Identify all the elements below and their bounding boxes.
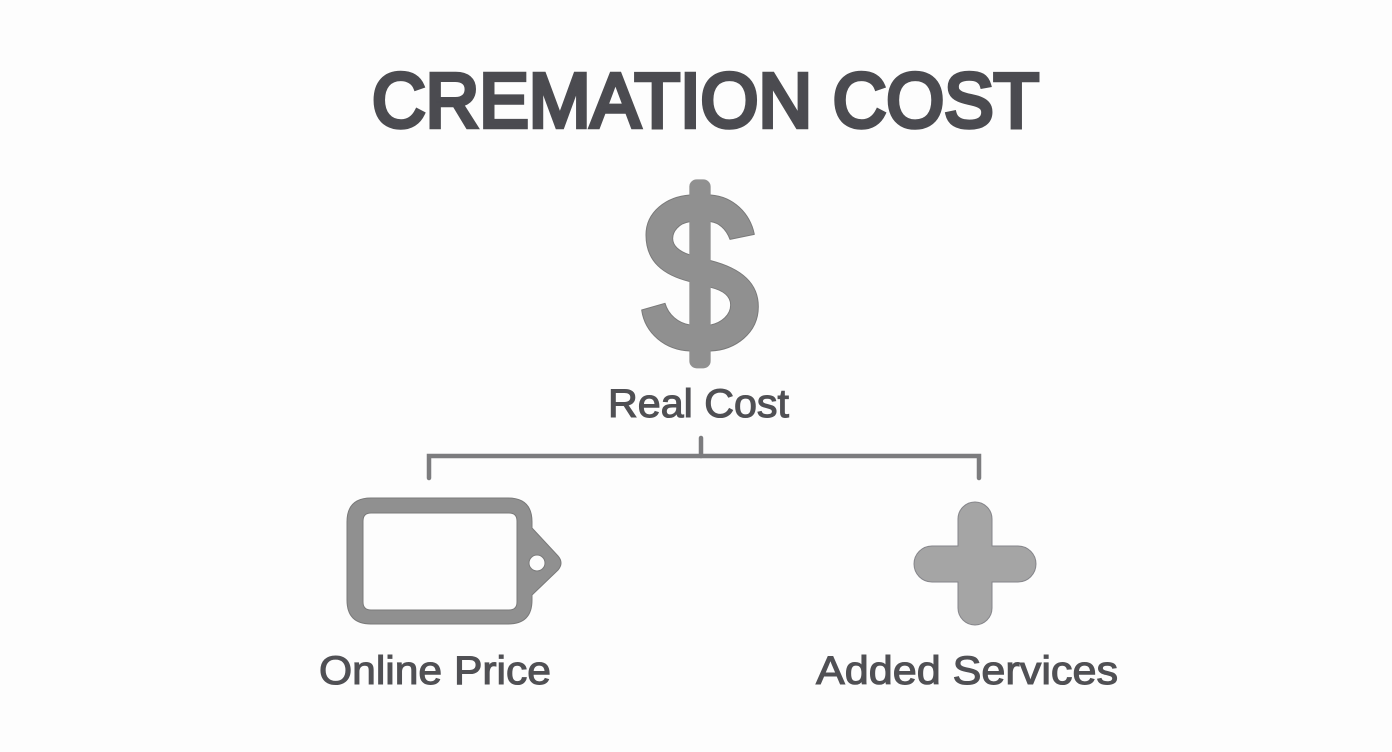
icon: plus sign (914, 502, 1036, 625)
connector bracket (429, 438, 979, 478)
title: CREMATION COST (372, 58, 1039, 144)
icon: price tag (347, 498, 561, 624)
label: real cost: Real Cost (608, 382, 789, 426)
label: added services: Added Services (816, 649, 1118, 693)
icon: dollar sign (642, 179, 758, 368)
label: online price: Online Price (319, 649, 551, 693)
